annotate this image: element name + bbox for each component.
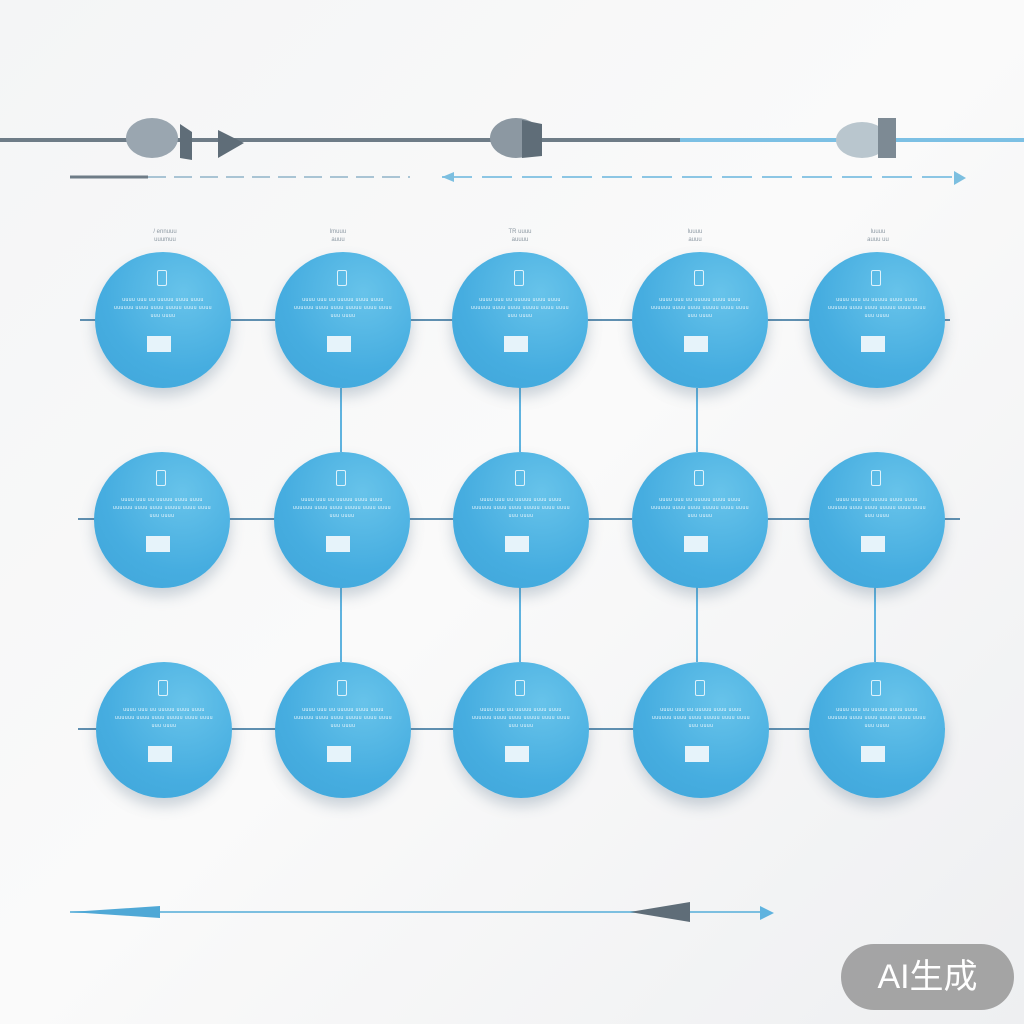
column labels: auuu	[331, 237, 345, 243]
column labels: auuu	[688, 237, 702, 243]
circle r1c4	[632, 252, 768, 388]
circle r1c4: uuuu uuu uu uuuuu uuuu uuuu uuuuuu uuuu uuuu uuuuu uuuu uuuu uuu uuuu	[651, 297, 749, 319]
watermark: AI生成	[877, 958, 978, 996]
column labels: uuumuu	[154, 237, 176, 243]
circle r3c5: uuuu uuu uu uuuuu uuuu uuuu uuuuuu uuuu uuuu uuuuu uuuu uuuu uuu uuuu	[828, 707, 926, 729]
circle r1c5	[809, 252, 945, 388]
circle r1c2	[275, 252, 411, 388]
circle r2c3	[453, 452, 589, 588]
circle r2c4: uuuu uuu uu uuuuu uuuu uuuu uuuuuu uuuu uuuu uuuuu uuuu uuuu uuu uuuu	[651, 497, 749, 519]
circle r3c1	[96, 662, 232, 798]
icon: marker 3	[836, 118, 896, 158]
column labels: lmuuu	[330, 229, 346, 235]
circle r1c5: uuuu uuu uu uuuuu uuuu uuuu uuuuuu uuuu uuuu uuuuu uuuu uuuu uuu uuuu	[828, 297, 926, 319]
icon: marker 2	[490, 118, 542, 158]
watermark	[841, 944, 1014, 1010]
top timeline	[0, 118, 1024, 185]
circle r1c1: uuuu uuu uu uuuuu uuuu uuuu uuuuuu uuuu uuuu uuuuu uuuu uuuu uuu uuuu	[114, 297, 212, 319]
circle r3c1: uuuu uuu uu uuuuu uuuu uuuu uuuuuu uuuu uuuu uuuuu uuuu uuuu uuu uuuu	[115, 707, 213, 729]
column labels: luuuu	[871, 229, 885, 235]
circle r2c1: uuuu uuu uu uuuuu uuuu uuuu uuuuuu uuuu uuuu uuuuu uuuu uuuu uuu uuuu	[113, 497, 211, 519]
column labels: / ennuuu	[153, 229, 177, 235]
circle r2c4	[632, 452, 768, 588]
circle r3c4	[633, 662, 769, 798]
bottom arrow	[70, 902, 774, 922]
arrow line	[70, 171, 966, 185]
circle r1c3: uuuu uuu uu uuuuu uuuu uuuu uuuuuu uuuu uuuu uuuuu uuuu uuuu uuu uuuu	[471, 297, 569, 319]
circle r1c1	[95, 252, 231, 388]
column labels	[153, 228, 889, 243]
circle r2c2: uuuu uuu uu uuuuu uuuu uuuu uuuuuu uuuu uuuu uuuuu uuuu uuuu uuu uuuu	[293, 497, 391, 519]
circle r2c1	[94, 452, 230, 588]
circle r3c3	[453, 662, 589, 798]
circle r2c3: uuuu uuu uu uuuuu uuuu uuuu uuuuuu uuuu uuuu uuuuu uuuu uuuu uuu uuuu	[472, 497, 570, 519]
circle r2c2	[274, 452, 410, 588]
column labels: auuu uu	[867, 237, 889, 243]
column labels: TR uuuu	[508, 229, 532, 235]
circle r2c5	[809, 452, 945, 588]
icon: marker 1	[126, 118, 244, 160]
circle r3c5	[809, 662, 945, 798]
circle r3c3: uuuu uuu uu uuuuu uuuu uuuu uuuuuu uuuu uuuu uuuuu uuuu uuuu uuu uuuu	[472, 707, 570, 729]
circle r3c4: uuuu uuu uu uuuuu uuuu uuuu uuuuuu uuuu uuuu uuuuu uuuu uuuu uuu uuuu	[652, 707, 750, 729]
circle r1c3	[452, 252, 588, 388]
circle r2c5: uuuu uuu uu uuuuu uuuu uuuu uuuuuu uuuu uuuu uuuuu uuuu uuuu uuu uuuu	[828, 497, 926, 519]
circle r1c2: uuuu uuu uu uuuuu uuuu uuuu uuuuuu uuuu uuuu uuuuu uuuu uuuu uuu uuuu	[294, 297, 392, 319]
circle r3c2	[275, 662, 411, 798]
circle r3c2: uuuu uuu uu uuuuu uuuu uuuu uuuuuu uuuu uuuu uuuuu uuuu uuuu uuu uuuu	[294, 707, 392, 729]
column labels: auuuu	[512, 237, 528, 243]
column labels: luuuu	[688, 229, 702, 235]
